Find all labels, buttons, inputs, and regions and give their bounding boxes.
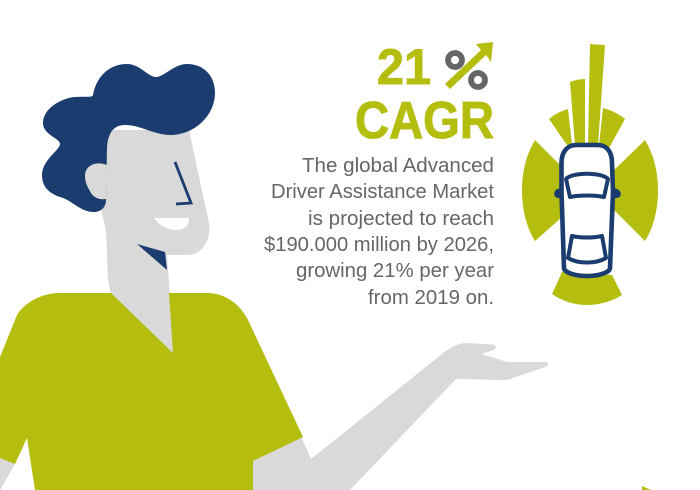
car windshield — [566, 174, 608, 197]
person: smile — [154, 218, 189, 230]
sensor zone: rear — [552, 272, 622, 305]
sensor zone: right — [612, 140, 658, 241]
description text block: The global Advanced — [302, 155, 494, 177]
person: left arm — [0, 456, 15, 490]
description text block: growing 21% per year — [296, 260, 494, 282]
person: neck and face — [100, 130, 209, 355]
corner fragment — [642, 486, 651, 490]
description text block: $190.000 million by 2026, — [264, 234, 494, 256]
person: shirt — [0, 293, 303, 490]
growth arrow — [445, 42, 493, 89]
person: neck shadow — [137, 244, 167, 270]
description text block: from 2019 on. — [368, 287, 494, 309]
number 21: 21 — [377, 39, 431, 95]
description text block — [264, 155, 494, 309]
percent sign rings — [448, 53, 485, 87]
person: ear — [85, 163, 107, 199]
headline: 21% CAGR — [355, 39, 494, 150]
description text block: is projected to reach — [308, 208, 494, 230]
word CAGR: CAGR — [355, 92, 494, 150]
car body — [562, 145, 613, 276]
illustration: person presenting — [0, 64, 548, 490]
person: hair — [42, 64, 215, 212]
person: right arm and open hand — [250, 343, 548, 490]
sensor zone: left — [522, 140, 562, 241]
description text block: Driver Assistance Market — [271, 181, 494, 203]
car rear window — [568, 236, 606, 262]
sensor bars: front — [549, 44, 625, 148]
car mirrors — [556, 190, 619, 196]
icon: car with sensor zones — [522, 44, 658, 305]
person: nose — [175, 162, 191, 204]
